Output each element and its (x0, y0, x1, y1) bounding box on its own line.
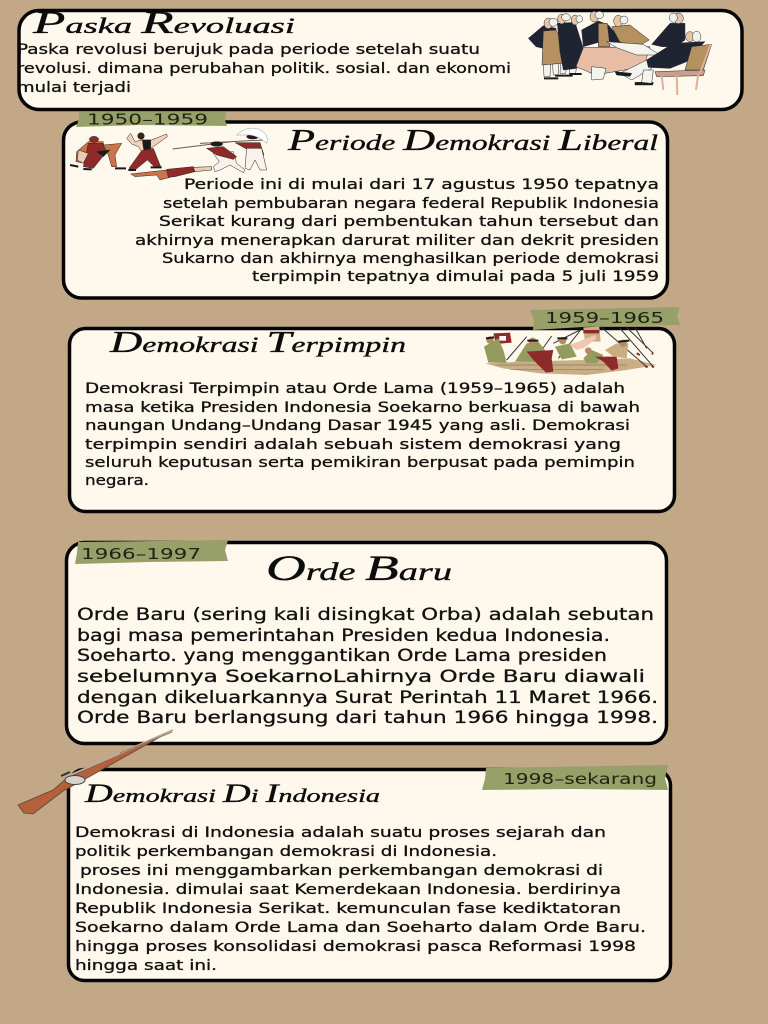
ribbon: 1998-sekarang: 1998–sekarang (503, 770, 657, 788)
text: Demokrasi Di Indonesia description: Indonesia. dimulai saat Kemerdekaan Indonesia. berdirinya (75, 882, 621, 898)
text: Periode Demokrasi Liberal description: terpimpin tepatnya dimulai pada 5 juli 1959 (252, 269, 659, 285)
heading: Demokrasi Terpimpin: D emokrasi T erpimpin (109, 324, 406, 359)
text: Demokrasi Di Indonesia description: Demokrasi di Indonesia adalah suatu proses sejarah dan (75, 825, 606, 841)
heading: Periode Demokrasi Liberal: P eriode D emokrasi L iberal (287, 122, 658, 157)
ribbon: 1966-1997 (75, 540, 228, 564)
text: Demokrasi Terpimpin description: terpimpin sendiri adalah sebuah sistem demokrasi yang (85, 437, 621, 453)
panel: Periode Demokrasi Liberal (64, 122, 668, 298)
panel: Demokrasi Terpimpin (70, 324, 674, 512)
icon: revolutionary soldiers firing (70, 128, 267, 180)
text: Periode Demokrasi Liberal description: Serikat kurang dari pembentukan tahun tersebut dan (159, 214, 659, 230)
text: Orde Baru description: Soeharto. yang menggantikan Orde Lama presiden (77, 646, 607, 666)
text: Paska Revolusi description (17, 42, 511, 96)
text: Periode Demokrasi Liberal description (135, 177, 659, 285)
text: Demokrasi Terpimpin description: negara. (85, 473, 149, 489)
ribbon: 1959-1965 (530, 307, 680, 330)
ribbon: 1950-1959: 1950–1959 (87, 110, 208, 128)
icon: founders around a table (528, 11, 712, 95)
text: Demokrasi Di Indonesia description: hingga saat ini. (75, 958, 217, 974)
text: Demokrasi Di Indonesia description: hingga proses konsolidasi demokrasi pasca Reformasi 1998 (75, 939, 636, 955)
text: Demokrasi Di Indonesia description: Soekarno dalam Orde Lama dan Soeharto dalam Orde Baru. (75, 920, 646, 936)
text: Demokrasi Terpimpin description (85, 381, 640, 489)
text: Periode Demokrasi Liberal description: Sukarno dan akhirnya menghasilkan periode demokrasi (162, 251, 659, 267)
heading: Paska Revolusi: P aska R evoluasi (31, 4, 295, 40)
text: Paska Revolusi description: Paska revolusi berujuk pada periode setelah suatu (17, 42, 480, 58)
text: Periode Demokrasi Liberal description: akhirnya menerapkan darurat militer dan dekrit presiden (135, 233, 659, 249)
text: Demokrasi Di Indonesia description (75, 825, 646, 974)
panel: Orde Baru (66, 542, 666, 744)
text: Orde Baru description: dengan dikeluarkannya Surat Perintah 11 Maret 1966. (77, 688, 658, 708)
text: Periode Demokrasi Liberal description: Periode ini di mulai dari 17 agustus 1950 tepatnya (184, 177, 659, 193)
text: Paska Revolusi description: revolusi. dimana perubahan politik. sosial. dan ekonomi (17, 61, 511, 77)
text: Periode Demokrasi Liberal description: setelah pembubaran negara federal Republik Indonesia (163, 196, 659, 212)
text: Demokrasi Terpimpin description: naungan Undang–Undang Dasar 1945 yang asli. Demokrasi (85, 418, 630, 434)
ribbon: 1966-1997: 1966–1997 (81, 545, 201, 563)
text: Demokrasi Terpimpin description: masa ketika Presiden Indonesia Soekarno berkuasa di bawah (85, 400, 640, 416)
heading: Orde Baru: O rde B aru (266, 548, 452, 588)
icon: soldiers with flags and spears (484, 327, 657, 375)
text: Demokrasi Di Indonesia description: politik perkembangan demokrasi di Indonesia. (75, 844, 497, 860)
text: Demokrasi Terpimpin description: Demokrasi Terpimpin atau Orde Lama (1959–1965) adalah (85, 381, 625, 397)
text: Paska Revolusi description: mulai terjadi (17, 80, 131, 96)
icon: musket (18, 730, 173, 814)
panel: Paska Revolusi (17, 4, 742, 110)
text: Demokrasi Di Indonesia description: proses ini menggambarkan perkembangan demokrasi di (80, 863, 603, 879)
text: Orde Baru description: sebelumnya SoekarnoLahirnya Orde Baru diawali (77, 667, 645, 687)
ribbon: 1950-1959 (76, 110, 227, 128)
panel: Demokrasi Di Indonesia (68, 770, 670, 980)
ribbon: 1959-1965: 1959–1965 (545, 309, 664, 327)
text: Orde Baru description (77, 605, 658, 728)
text: Demokrasi Terpimpin description: seluruh keputusan serta pemikiran berpusat pada pemimpin (85, 455, 635, 471)
heading: Demokrasi Di Indonesia: D emokrasi D i Indonesia (84, 779, 380, 808)
text: Demokrasi Di Indonesia description: Republik Indonesia Serikat. kemunculan fase kediktatoran (75, 901, 621, 917)
text: Orde Baru description: Orde Baru (sering kali disingkat Orba) adalah sebutan (77, 605, 654, 625)
ribbon: 1998-sekarang (482, 765, 668, 790)
text: Orde Baru description: Orde Baru berlangsung dari tahun 1966 hingga 1998. (77, 708, 658, 728)
text: Orde Baru description: bagi masa pemerintahan Presiden kedua Indonesia. (77, 626, 610, 646)
